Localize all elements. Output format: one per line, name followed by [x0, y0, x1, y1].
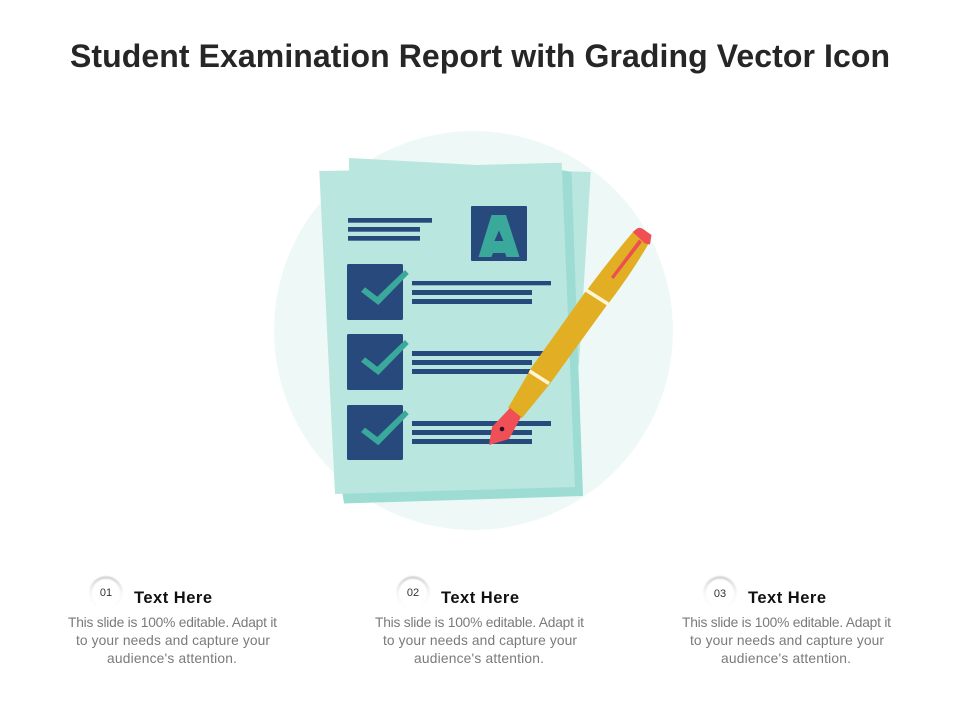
item 3: [682, 578, 891, 666]
number badge 03: [704, 578, 736, 608]
back paper: [560, 171, 591, 365]
heading lines: [348, 218, 432, 241]
pen nib: [489, 408, 521, 445]
number badge 02: 02: [407, 587, 419, 599]
checklist row 1: [347, 264, 551, 320]
pen grip: [508, 372, 549, 418]
title: Student Examination Report with Grading Vector Icon: [70, 38, 890, 74]
number badge 03: 03: [714, 588, 726, 600]
checklist row 3: [347, 405, 551, 460]
pen: [489, 228, 652, 445]
nib hole: [500, 427, 504, 431]
description: to your needs and capture your: [690, 633, 884, 648]
pen clip: [611, 240, 642, 279]
heading: Text Here: [748, 589, 826, 607]
description: audience's attention.: [721, 651, 851, 666]
description: audience's attention.: [414, 651, 544, 666]
number badge 01: 01: [100, 587, 112, 599]
description: [68, 615, 277, 666]
description: to your needs and capture your: [383, 633, 577, 648]
description: [682, 615, 891, 666]
background circle: [274, 131, 673, 530]
description: audience's attention.: [107, 651, 237, 666]
front paper: [319, 158, 575, 494]
pen barrel: [529, 291, 607, 385]
paper shadow: [342, 170, 583, 504]
description: This slide is 100% editable. Adapt it: [68, 615, 277, 630]
pen cap: [587, 232, 649, 304]
item 1: [68, 578, 277, 666]
description: This slide is 100% editable. Adapt it: [682, 615, 891, 630]
pen top: [633, 228, 652, 244]
description: to your needs and capture your: [76, 633, 270, 648]
number badge 01: [90, 578, 122, 608]
grade badge A: [471, 206, 527, 261]
item 2: [375, 578, 584, 666]
description: [375, 615, 584, 666]
description: This slide is 100% editable. Adapt it: [375, 615, 584, 630]
checklist row 2: [347, 334, 551, 390]
heading: Text Here: [441, 589, 519, 607]
heading: Text Here: [134, 589, 212, 607]
number badge 02: [398, 578, 428, 608]
icon: exam report with pen: [274, 131, 673, 530]
pen bands: [585, 288, 609, 306]
